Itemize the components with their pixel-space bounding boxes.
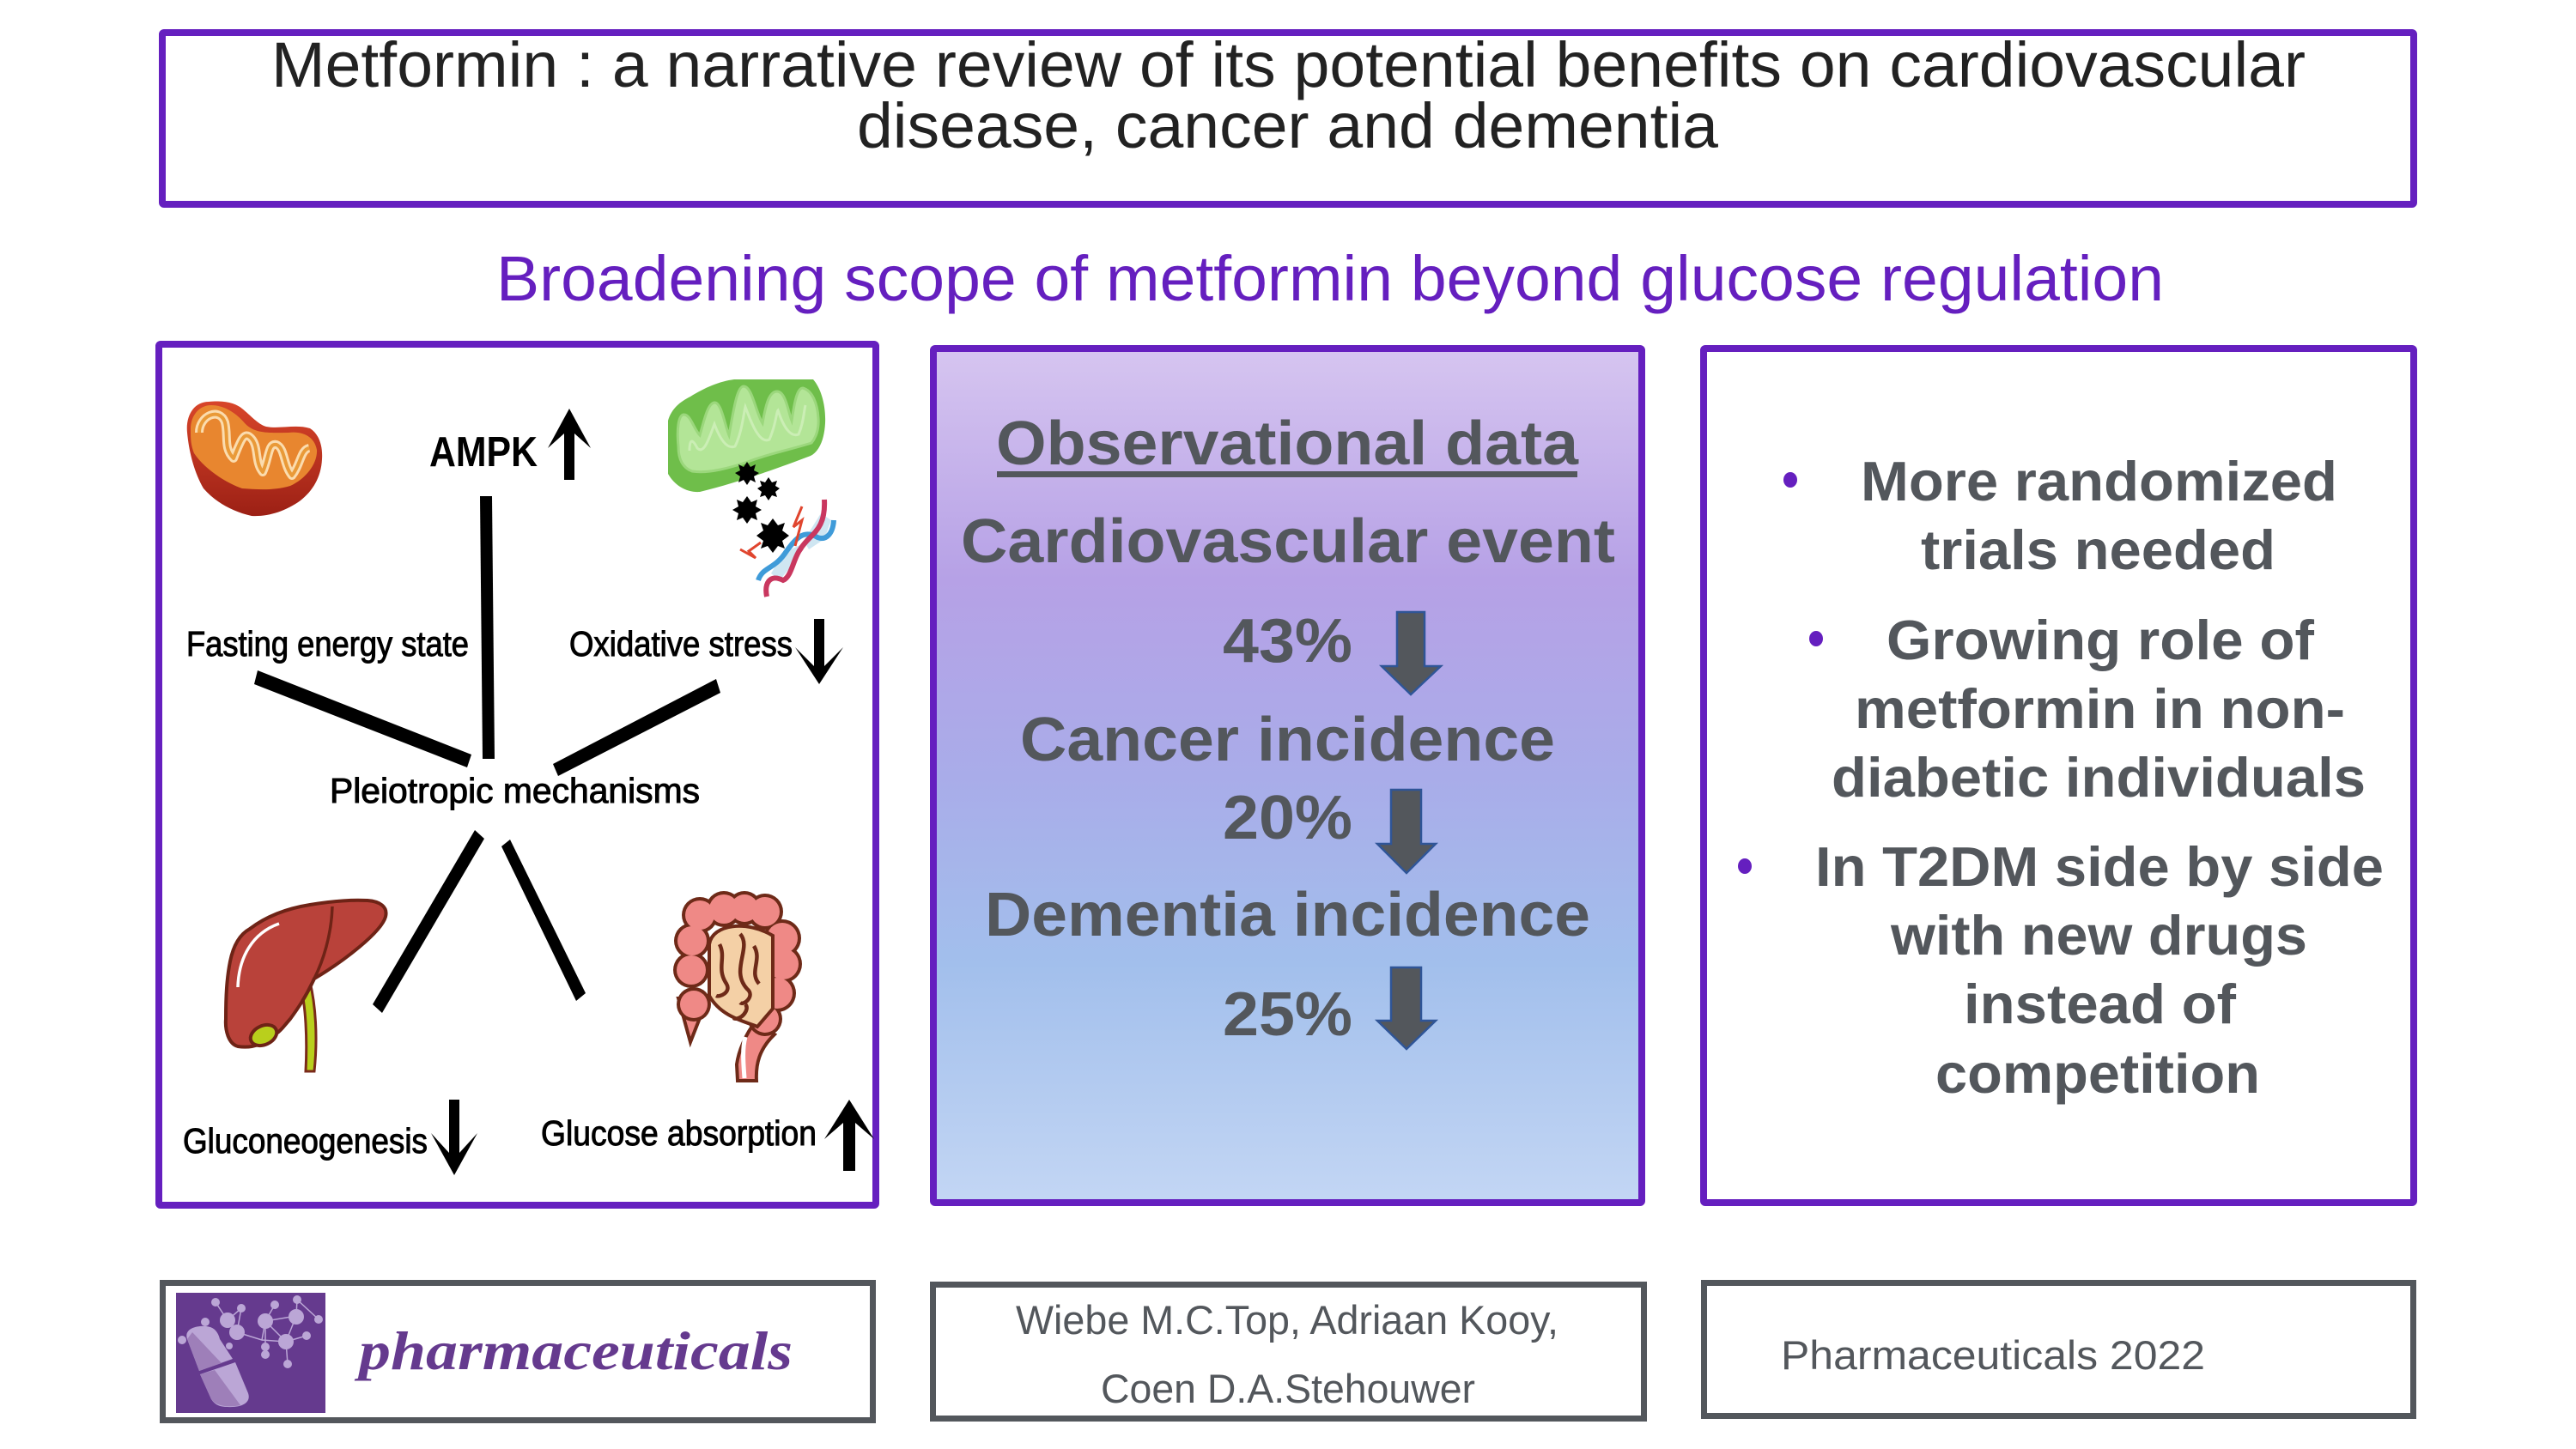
- arrow down: 43%: [1382, 612, 1441, 694]
- connector line: oxidative stress: [553, 679, 720, 776]
- bullet: growing role of metformin: diabetic individuals: [1832, 746, 2366, 809]
- authors text: Wiebe M.C.Top, Adriaan Kooy,: [1016, 1297, 1558, 1343]
- title box: [162, 29, 2414, 204]
- footer: citation: [1704, 1282, 2413, 1416]
- connector line: AMPK: [480, 496, 495, 759]
- panel: pleiotropic mechanisms: [159, 344, 876, 1205]
- label: oxidative stress: Oxidative stress: [569, 624, 793, 664]
- center label: pleiotropic mechanisms: Pleiotropic mechanisms: [330, 771, 700, 810]
- label: cardiovascular event: Cardiovascular event: [961, 507, 1615, 576]
- heading: observational data: Observational data: [996, 409, 1579, 478]
- bullet: T2DM side by side: competition: [1935, 1042, 2260, 1105]
- AMPK label: AMPK: [429, 429, 538, 476]
- subtitle: Broadening scope of metformin beyond glucose regulation: [496, 243, 2164, 314]
- arrow up: AMPK: [548, 409, 591, 480]
- footer: journal logo: [163, 1282, 872, 1420]
- bullet: more randomized trials: [1783, 450, 2337, 581]
- icon: red mitochondrion: [187, 401, 322, 516]
- label: fasting energy state: Fasting energy state: [186, 624, 469, 664]
- label: dementia incidence: Dementia incidence: [985, 881, 1590, 949]
- arrow up: glucose absorption: [824, 1100, 874, 1171]
- authors text: Coen D.A.Stehouwer: [1101, 1366, 1475, 1411]
- connector line: glucose absorption: [501, 840, 586, 1001]
- journal name: pharmaceuticals: [354, 1320, 793, 1381]
- arrow down: oxidative stress: [795, 619, 843, 684]
- value: 25%: 25%: [1223, 980, 1352, 1049]
- citation text: Pharmaceuticals 2022: [1781, 1332, 2205, 1378]
- bullet: more randomized trials: trials needed: [1921, 518, 2275, 581]
- bullet: more randomized trials: More randomized: [1861, 450, 2337, 512]
- bullet: T2DM side by side: instead of: [1964, 973, 2236, 1035]
- icon: pharmaceuticals logo square: [176, 1293, 325, 1413]
- bullet: growing role of metformin: [1809, 609, 2366, 809]
- connector line: fasting energy state: [254, 670, 471, 767]
- label: cancer incidence: Cancer incidence: [1020, 706, 1555, 774]
- label: gluconeogenesis: Gluconeogenesis: [183, 1121, 428, 1161]
- footer: authors: [933, 1284, 1643, 1418]
- icon: intestine: [673, 891, 802, 1081]
- value: 20%: 20%: [1223, 784, 1352, 852]
- bullet: T2DM side by side: In T2DM side by side: [1815, 835, 2384, 898]
- bullet: growing role of metformin: metformin in non-: [1855, 677, 2345, 740]
- title text: disease, cancer and dementia: [857, 90, 1719, 161]
- title text: Metformin : a narrative review of its potential benefits on cardiovascular: [271, 29, 2306, 100]
- authors text: [1016, 1297, 1558, 1411]
- label: glucose absorption: Glucose absorption: [541, 1113, 817, 1153]
- bullet: T2DM side by side: with new drugs: [1890, 904, 2307, 967]
- bullet: growing role of metformin: Growing role of: [1886, 609, 2314, 671]
- panel: observational data: [933, 349, 1642, 1203]
- connector line: gluconeogenesis: [373, 830, 484, 1013]
- arrow down: 25%: [1377, 967, 1436, 1049]
- value: 43%: 43%: [1223, 607, 1352, 676]
- arrow down: gluconeogenesis: [431, 1100, 477, 1175]
- icon: liver: [226, 900, 386, 1071]
- arrow down: 20%: [1377, 790, 1436, 873]
- title text: [271, 29, 2306, 161]
- icon: green mitochondrion with radicals and DNA: [668, 379, 834, 597]
- panel: conclusions: [1704, 349, 2414, 1203]
- bullet: T2DM side by side: [1738, 835, 2384, 1105]
